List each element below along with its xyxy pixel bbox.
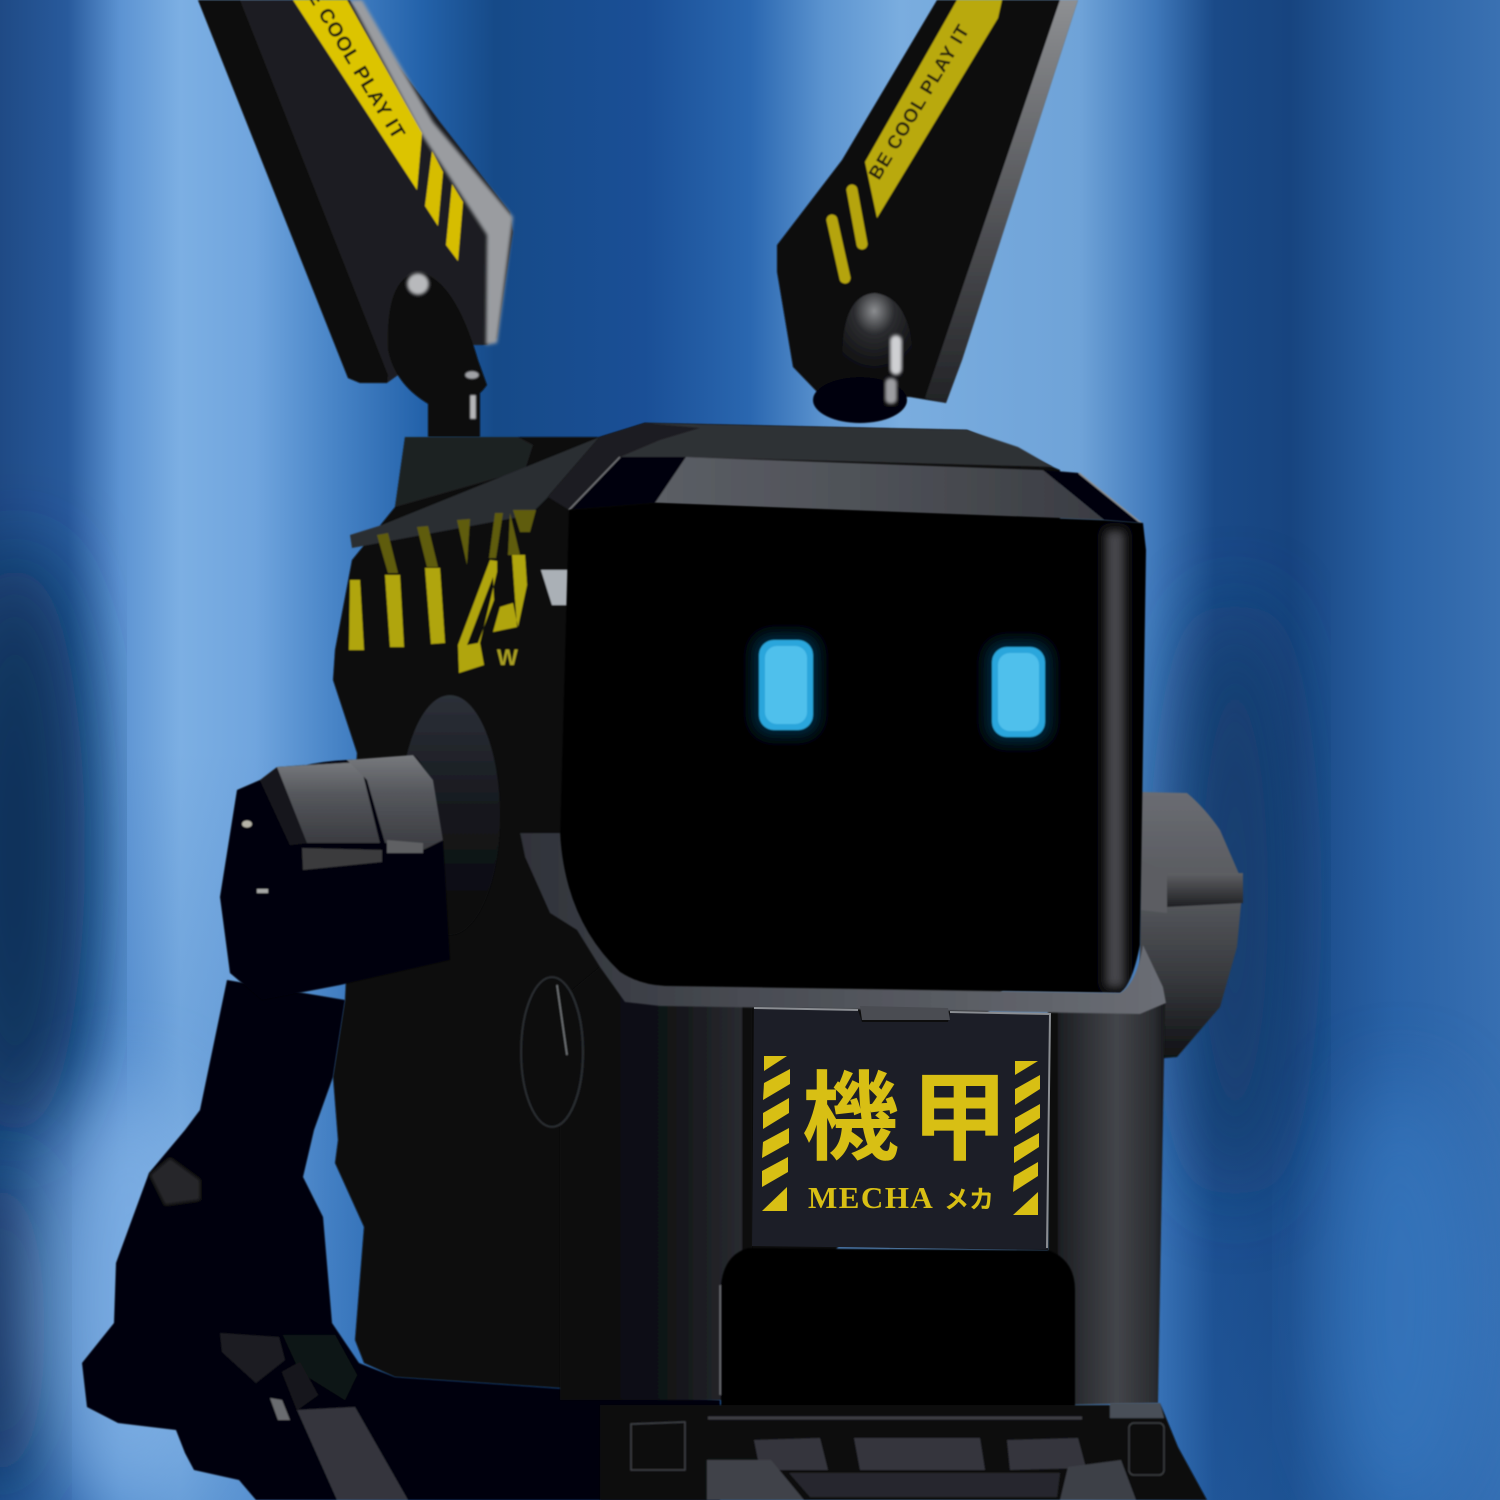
antenna band: BE COOL PLAY IT	[865, 21, 975, 184]
head lid	[548, 423, 1141, 523]
antenna joint	[388, 272, 487, 437]
hip dark block	[631, 1422, 685, 1470]
left antenna	[198, 0, 513, 437]
body hazard decal	[349, 510, 536, 673]
hand details	[150, 1158, 200, 1205]
label left stripes	[762, 1056, 790, 1211]
mecha label plate	[752, 1006, 1050, 1250]
antenna stripes	[832, 190, 862, 278]
antenna stripes	[425, 151, 463, 261]
robot back and body side	[333, 423, 1060, 1400]
lower body frame	[521, 967, 1165, 1405]
chest opening	[720, 1248, 1075, 1412]
neck block	[395, 437, 533, 507]
eye: left	[752, 633, 820, 737]
right antenna	[777, 0, 1078, 423]
label katakana: メカ	[944, 1186, 994, 1214]
hip cylinders	[754, 1438, 1086, 1470]
body round joint	[521, 977, 583, 1127]
frame rim around face	[520, 833, 1166, 1014]
right hip knob	[1129, 1423, 1164, 1475]
leg lower blocks	[707, 1460, 1136, 1500]
antenna band	[293, 0, 422, 190]
label subtitle: MECHA	[808, 1180, 934, 1215]
right shoulder	[1140, 792, 1243, 1060]
head face screen	[560, 503, 1146, 993]
head right side texture	[1105, 530, 1125, 988]
body hazard decal: W	[497, 645, 518, 670]
eye: right	[985, 640, 1052, 744]
lower hip and legs	[600, 1403, 1207, 1500]
end cap bolts	[242, 820, 252, 828]
antenna band	[865, 0, 1002, 218]
left shoulder hub	[400, 695, 500, 935]
left shoulder cylinder	[220, 755, 450, 1000]
label kanji: 機甲	[802, 1066, 1020, 1173]
slanted shoulder panel	[350, 437, 600, 548]
left arm and hand silhouette	[82, 980, 720, 1500]
label right stripes	[1013, 1061, 1040, 1215]
antenna joint	[813, 293, 913, 423]
